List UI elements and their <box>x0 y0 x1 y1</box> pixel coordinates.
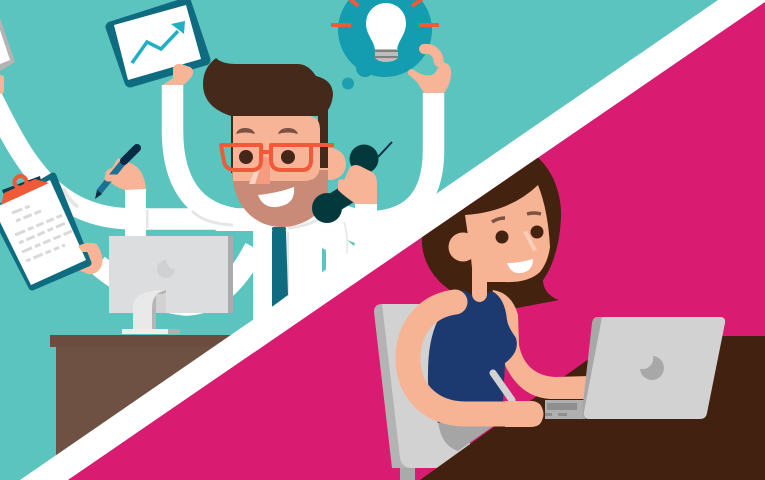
pen <box>99 160 125 192</box>
face <box>448 185 550 282</box>
thumb on clipboard <box>78 243 99 252</box>
monitor logo <box>157 260 175 278</box>
eyes <box>239 150 253 164</box>
hand behind clipboard <box>78 243 102 274</box>
shirt body <box>215 205 420 405</box>
laptop logo <box>640 356 664 380</box>
laptop <box>582 317 725 419</box>
clipboard <box>0 176 88 287</box>
sleeve <box>355 203 377 243</box>
necktie <box>272 227 288 307</box>
lightbulb <box>366 3 406 50</box>
rising chart arrow <box>132 31 178 63</box>
hand holding pen <box>95 148 146 199</box>
hand holding tablet <box>163 64 193 85</box>
teal gaps in shirt <box>322 240 355 274</box>
lower face <box>232 170 328 227</box>
white shirt arms <box>0 85 434 305</box>
smile <box>258 187 294 207</box>
monitor stand <box>133 290 166 330</box>
right arm <box>490 290 590 399</box>
eyebrows <box>492 218 505 222</box>
nose highlight <box>523 231 537 251</box>
tablet with chart <box>111 3 205 82</box>
thought bubble with lightbulb <box>331 0 439 90</box>
pencil <box>493 373 512 400</box>
pen sleeve <box>125 189 146 241</box>
eyebrows <box>236 128 255 134</box>
panel: focused woman scene <box>374 157 765 480</box>
hair <box>422 157 561 308</box>
face shape <box>465 185 550 282</box>
clipboard text lines <box>12 206 72 261</box>
telephone <box>312 142 392 243</box>
clipboard clip <box>2 176 42 200</box>
eyes <box>496 230 508 244</box>
monitor <box>109 236 233 334</box>
chair seat shadow <box>438 422 493 451</box>
ear <box>314 148 346 180</box>
ear <box>448 232 472 262</box>
head <box>203 58 346 227</box>
dress <box>428 290 517 423</box>
laptop keyboard <box>545 400 585 419</box>
paper held at top left <box>0 18 15 96</box>
panel: multitasking man scene <box>0 0 451 480</box>
nose <box>249 157 270 184</box>
hair <box>203 58 333 173</box>
writing hand <box>505 401 543 427</box>
hand touching bubble <box>408 49 451 93</box>
chair <box>374 304 495 480</box>
glasses <box>221 145 334 170</box>
rays <box>331 0 439 25</box>
neck <box>472 270 487 302</box>
shirt shadows <box>63 188 381 296</box>
hair sideburn <box>320 110 328 168</box>
left arm writing <box>408 302 531 414</box>
hand holding telephone <box>338 165 377 204</box>
desk <box>420 336 765 480</box>
upper face <box>233 116 320 181</box>
smile <box>507 259 533 273</box>
desk <box>50 335 250 480</box>
